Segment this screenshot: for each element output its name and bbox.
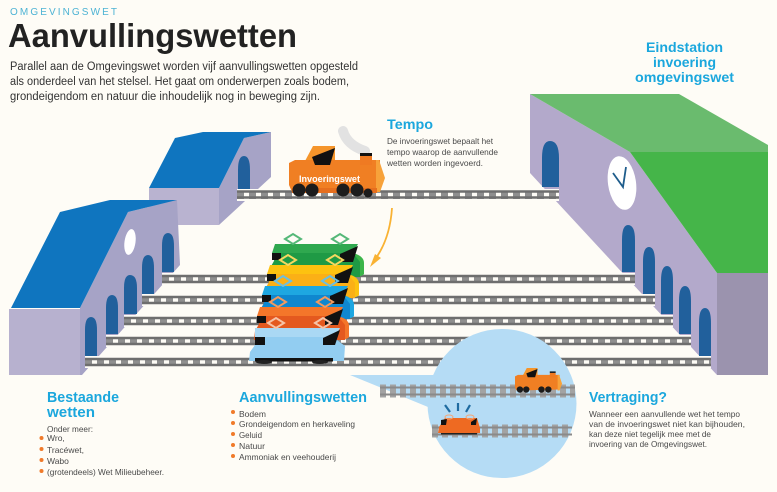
alert marks: [445, 403, 470, 412]
back station: [149, 132, 271, 225]
panel: Vertraging: [589, 389, 745, 449]
panel: Bestaande wetten: Wabo: [47, 456, 69, 466]
heading and text: Tempo: wetten worden ingevoerd.: [386, 158, 483, 168]
heading: Eindstation: [635, 39, 734, 85]
intro text: als onderdeel van het stelsel. Het gaat om onderwerpen zoals bodem,: [10, 76, 349, 88]
end station arches: [542, 141, 711, 356]
smoke: [343, 131, 365, 151]
panel: Bestaande wetten: Onder meer:: [47, 424, 93, 434]
panel: Vertraging: kan deze niet tegelijk mee met de: [589, 429, 711, 439]
panel: Aanvullingswetten: [231, 389, 367, 462]
heading and text: Tempo: Tempo: [387, 116, 433, 132]
panel: Aanvullingswetten: Geluid: [239, 430, 262, 440]
small locomotive: [515, 368, 562, 393]
panel: Aanvullingswetten: Ammoniak en veehouderij: [239, 452, 336, 462]
station clock: [123, 228, 137, 256]
panel: Vertraging: Wanneer een aanvullende wet het tempo: [589, 409, 740, 419]
train: yellow: [264, 255, 359, 298]
heading and text: Tempo: tempo waarop de aanvullende: [387, 147, 498, 157]
arrow: tempo to trains: [370, 208, 392, 267]
intro text: [10, 61, 358, 103]
kicker: Omgevingswet: OMGEVINGSWET: [10, 7, 117, 18]
heading and text: Tempo: [386, 116, 498, 168]
panel: Bestaande wetten: (grotendeels) Wet Milieubeheer.: [47, 467, 164, 477]
locomotive: Invoeringswet: Invoeringswet: [299, 174, 360, 184]
panel: Bestaande wetten: [40, 389, 164, 477]
heading and text: Tempo: De invoeringswet bepaalt het: [387, 136, 494, 146]
train: green: [269, 234, 364, 277]
panel: Aanvullingswetten: Aanvullingswetten: [239, 389, 367, 406]
heading: Eindstation: omgevingswet: [635, 69, 734, 85]
panel: Vertraging: invoering van de Omgevingswet.: [589, 439, 707, 449]
intro text: grondeigendom en natuur die inhoudelijk nog in beweging zijn.: [10, 91, 320, 103]
panel: Vertraging: Vertraging?: [589, 389, 667, 406]
panel: Aanvullingswetten: Bodem: [239, 409, 266, 419]
panel: Vertraging: van de invoeringswet niet kan bijhouden,: [589, 419, 745, 429]
intro text: Parallel aan de Omgevingswet worden vijf aanvullingswetten opgesteld: [10, 61, 358, 73]
heading: Eindstation: invoering: [653, 54, 716, 70]
train: light blue: [249, 318, 345, 364]
detail tracks: [380, 388, 575, 434]
front left station: [9, 200, 180, 375]
locomotive: Invoeringswet: [289, 131, 385, 198]
train: orange: [254, 297, 349, 340]
train: blue: [259, 276, 354, 319]
stacked trains: aanvullingswetten: [249, 234, 364, 364]
small delayed wagon: [438, 415, 480, 434]
panel: Bestaande wetten: Tracéwet,: [47, 445, 84, 455]
panel: Aanvullingswetten: Natuur: [239, 441, 265, 451]
panel: Aanvullingswetten: Grondeigendom en herkaveling: [239, 419, 355, 429]
title: Aanvullingswetten: [8, 17, 297, 54]
end station: [530, 94, 768, 375]
callout: delay detail: [350, 329, 576, 478]
panel: Bestaande wetten: wetten: [46, 404, 95, 421]
railway tracks: [85, 189, 711, 368]
panel: Bestaande wetten: Bestaande: [47, 389, 119, 406]
panel: Bestaande wetten: Wro,: [47, 433, 65, 443]
end station clock: [604, 154, 640, 212]
heading: Eindstation: Eindstation: [646, 39, 723, 55]
station arches: [85, 233, 174, 356]
